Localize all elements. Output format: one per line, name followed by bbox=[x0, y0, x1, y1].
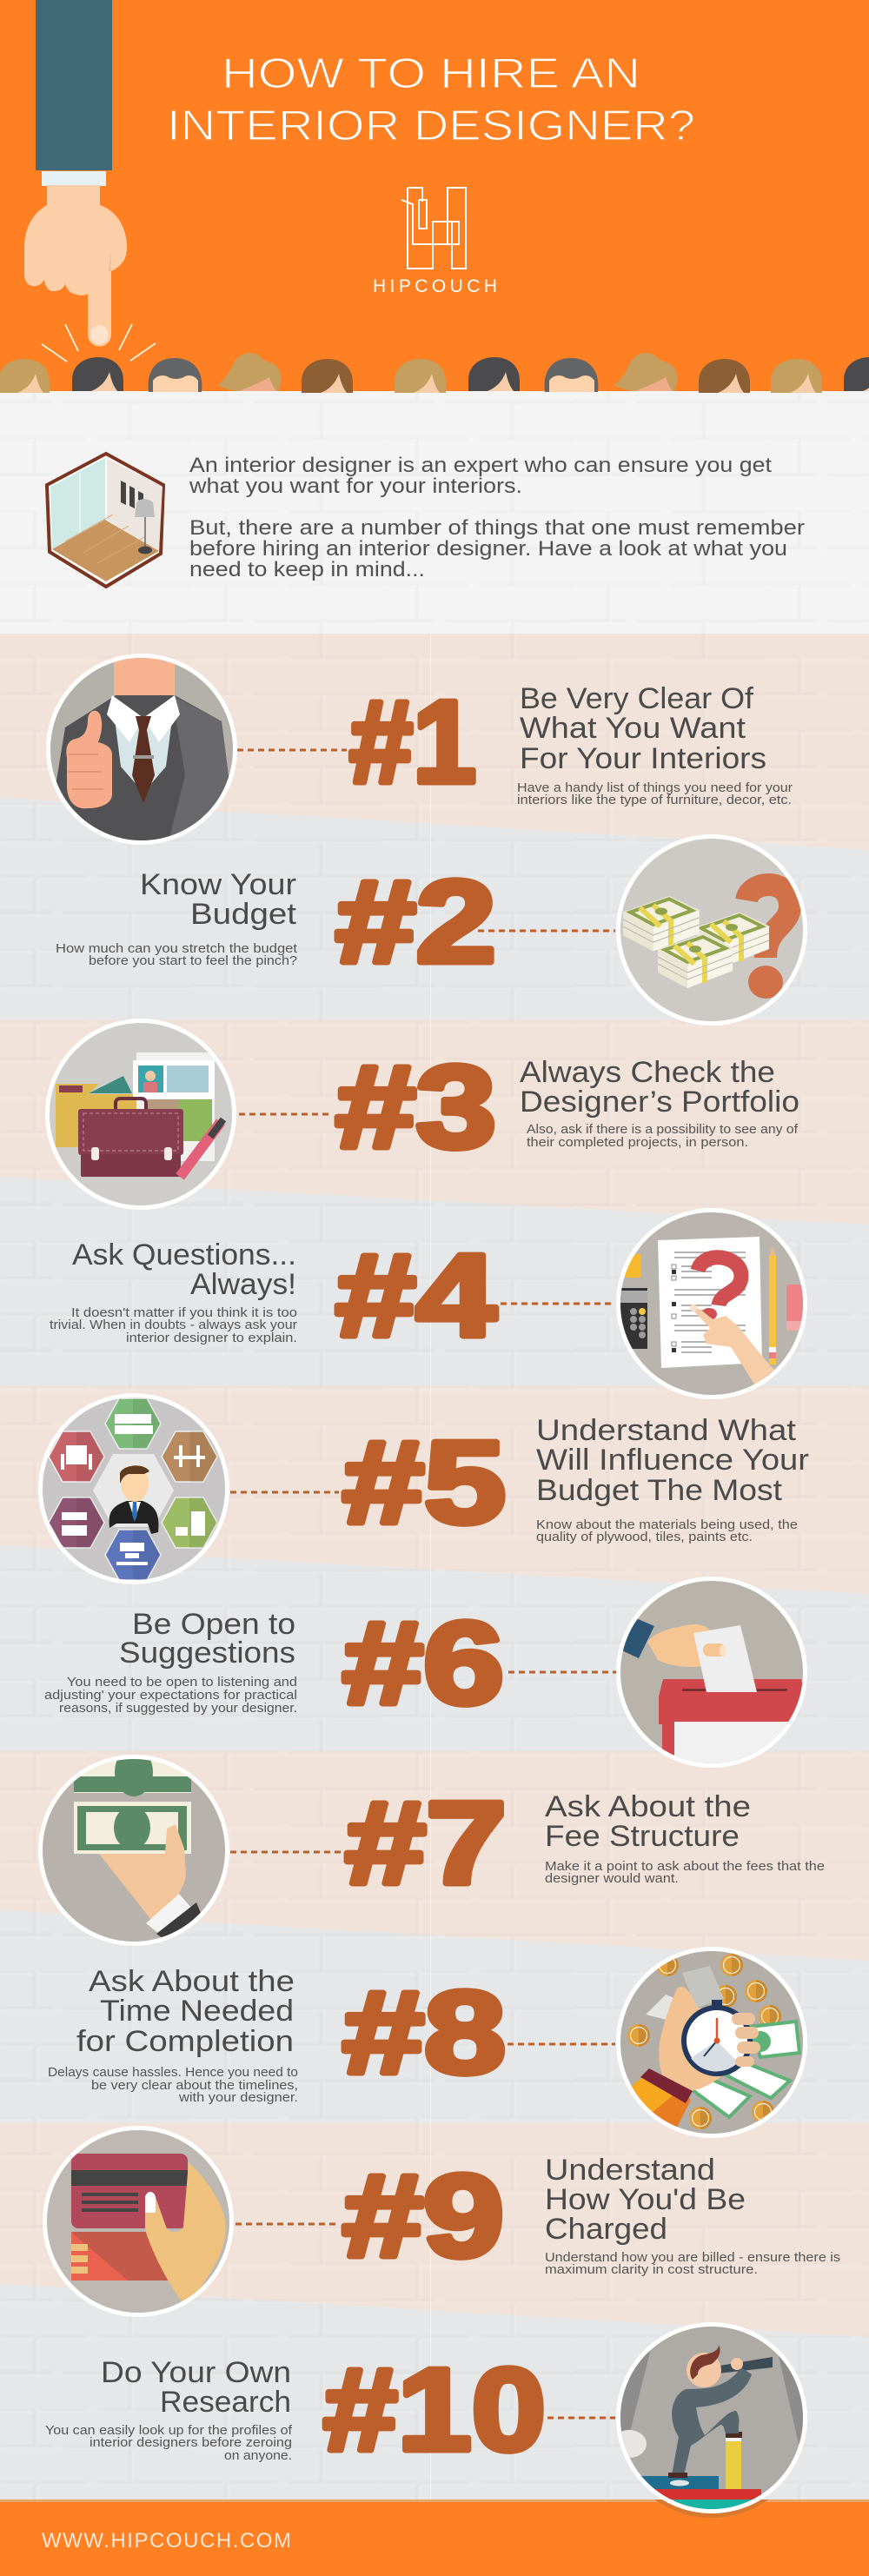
description 4 bbox=[50, 1306, 297, 1345]
step 6 bbox=[44, 1577, 807, 1774]
heading 8: for Completion bbox=[76, 2025, 294, 2058]
heading 6: Suggestions bbox=[119, 1637, 295, 1670]
step 4 bbox=[50, 1208, 807, 1399]
header panel bbox=[0, 0, 869, 393]
description 6: reasons, if suggested by your designer. bbox=[59, 1702, 297, 1716]
illustration: hand holding stopwatch bbox=[616, 1947, 807, 2138]
description 2: How much can you stretch the budget bbox=[56, 942, 297, 956]
heading 6 bbox=[119, 1608, 295, 1670]
description 6: adjusting' your expectations for practical bbox=[44, 1689, 297, 1703]
heading 5 bbox=[536, 1414, 809, 1507]
heading 9: How You'd Be bbox=[545, 2183, 746, 2216]
description 4: trivial. When in doubts - always ask your bbox=[50, 1318, 297, 1332]
description 3 bbox=[527, 1123, 799, 1150]
connector bbox=[237, 749, 347, 751]
illustration: man with telescope on books bbox=[612, 2321, 810, 2518]
heading 2: Know Your bbox=[140, 868, 296, 901]
description 10: on anyone. bbox=[224, 2449, 292, 2463]
logo: hipcouch bbox=[373, 188, 497, 296]
heading 3: Designer’s Portfolio bbox=[520, 1086, 799, 1119]
illustration: portfolio briefcase bbox=[45, 1019, 236, 1210]
intro text: But, there are a number of things that one must remember bbox=[189, 516, 805, 540]
heading 4 bbox=[72, 1238, 296, 1301]
description 8 bbox=[48, 2066, 298, 2105]
description 5: quality of plywood, tiles, paints etc. bbox=[536, 1530, 753, 1544]
step 3 bbox=[45, 1019, 799, 1210]
number 1: #1 bbox=[349, 676, 476, 807]
illustration: hand holding banknotes bbox=[38, 1748, 229, 1948]
heading 2: Budget bbox=[190, 898, 297, 931]
illustration: money stacks and question mark bbox=[616, 834, 807, 1026]
illustration: businessman thumbs up bbox=[46, 654, 237, 845]
description 1: interiors like the type of furniture, decor, etc. bbox=[517, 793, 792, 807]
description 1 bbox=[517, 781, 793, 807]
connector bbox=[547, 2416, 615, 2420]
number 6: #6 bbox=[342, 1597, 504, 1729]
connector bbox=[230, 1491, 339, 1493]
logo: hipcouch: HIPCOUCH bbox=[373, 276, 497, 296]
icon: isometric room bbox=[47, 454, 163, 587]
intro text: An interior designer is an expert who can ensure you get bbox=[189, 454, 772, 477]
description 6 bbox=[44, 1676, 297, 1716]
description 4: interior designer to explain. bbox=[126, 1331, 297, 1345]
number 7: #7 bbox=[345, 1777, 507, 1909]
title: HOW TO HIRE AN bbox=[222, 50, 640, 97]
description 2 bbox=[56, 942, 297, 968]
heading 4: Ask Questions... bbox=[72, 1238, 296, 1271]
connector bbox=[230, 1851, 341, 1853]
number 5: #5 bbox=[342, 1417, 506, 1548]
description 10 bbox=[45, 2424, 293, 2463]
intro panel bbox=[47, 454, 805, 587]
heading 5: Will Influence Your bbox=[536, 1444, 809, 1477]
heading 7 bbox=[545, 1790, 751, 1853]
icon: attention rays bbox=[42, 324, 156, 362]
connector bbox=[507, 2042, 615, 2046]
step 1 bbox=[46, 654, 793, 845]
title: INTERIOR DESIGNER? bbox=[167, 103, 695, 149]
heading 1: What You Want bbox=[520, 712, 746, 745]
heading 3: Always Check the bbox=[520, 1056, 775, 1089]
description 6: You need to be open to listening and bbox=[67, 1676, 297, 1690]
step 2 bbox=[56, 834, 807, 1026]
description 10: You can easily look up for the profiles of bbox=[45, 2424, 293, 2438]
connector bbox=[235, 2223, 339, 2225]
heading 1: For Your Interiors bbox=[520, 742, 766, 775]
heading 10 bbox=[101, 2356, 291, 2419]
heading 8: Time Needed bbox=[100, 1995, 294, 2028]
heading 5: Understand What bbox=[536, 1414, 797, 1447]
intro text: what you want for your interiors. bbox=[189, 475, 522, 498]
connector bbox=[501, 1302, 614, 1305]
step 5 bbox=[38, 1393, 809, 1584]
connector bbox=[239, 1112, 333, 1116]
number 3: #3 bbox=[335, 1041, 496, 1172]
illustration: ballot box bbox=[616, 1577, 807, 1774]
number 9: #9 bbox=[342, 2150, 504, 2281]
step 10 bbox=[45, 2321, 810, 2518]
heading 7: Fee Structure bbox=[545, 1820, 740, 1853]
heading 4: Always! bbox=[190, 1268, 296, 1301]
heading 8 bbox=[76, 1965, 295, 2058]
illustration: designer and furniture hexagons bbox=[38, 1393, 229, 1584]
description 8: with your designer. bbox=[178, 2091, 298, 2105]
description 1: Have a handy list of things you need for your bbox=[517, 781, 793, 795]
description 3: Also, ask if there is a possibility to see any of bbox=[527, 1123, 799, 1137]
description 7: designer would want. bbox=[545, 1872, 679, 1886]
heading 5: Budget The Most bbox=[536, 1474, 783, 1507]
description 9: maximum clarity in cost structure. bbox=[545, 2263, 758, 2277]
number 2: #2 bbox=[335, 856, 496, 987]
step 8 bbox=[48, 1947, 807, 2138]
heading 7: Ask About the bbox=[545, 1790, 751, 1823]
number 4: #4 bbox=[335, 1230, 496, 1361]
illustration: hand holding credit card bbox=[43, 2126, 234, 2317]
footer url: WWW.HIPCOUCH.COM bbox=[42, 2529, 291, 2553]
description 9 bbox=[545, 2251, 840, 2277]
number 8: #8 bbox=[342, 1967, 506, 2098]
title bbox=[167, 50, 695, 149]
heading 1 bbox=[520, 682, 766, 775]
heading 10: Do Your Own bbox=[101, 2356, 291, 2389]
intro text bbox=[189, 454, 805, 581]
description 10: interior designers before zeroing bbox=[90, 2436, 292, 2450]
heading 9: Understand bbox=[545, 2154, 715, 2187]
audience heads bbox=[0, 353, 869, 393]
heading 3 bbox=[520, 1056, 799, 1119]
step 7 bbox=[38, 1748, 825, 1948]
heading 8: Ask About the bbox=[89, 1965, 295, 1998]
footer bar bbox=[0, 2500, 869, 2576]
description 5: Know about the materials being used, the bbox=[536, 1518, 798, 1532]
heading 9: Charged bbox=[545, 2213, 667, 2246]
connector bbox=[508, 1670, 616, 1674]
description 8: Delays cause hassles. Hence you need to bbox=[48, 2066, 298, 2080]
heading 10: Research bbox=[160, 2386, 291, 2419]
step 9 bbox=[43, 2126, 840, 2317]
description 4: It doesn't matter if you think it is too bbox=[71, 1306, 297, 1320]
heading 1: Be Very Clear Of bbox=[520, 682, 754, 715]
description 8: be very clear about the timelines, bbox=[91, 2079, 298, 2093]
illustration: questionnaire bbox=[616, 1208, 807, 1399]
intro text: need to keep in mind... bbox=[189, 558, 425, 581]
description 7: Make it a point to ask about the fees that the bbox=[545, 1860, 825, 1874]
icon: pointing hand bbox=[24, 0, 127, 346]
heading 2 bbox=[140, 868, 297, 931]
connector bbox=[478, 930, 615, 932]
description 3: their completed projects, in person. bbox=[527, 1136, 748, 1150]
description 7 bbox=[545, 1860, 825, 1886]
number 10: #10 bbox=[323, 2344, 546, 2475]
description 5 bbox=[536, 1518, 798, 1544]
description 2: before you start to feel the pinch? bbox=[89, 954, 297, 968]
heading 6: Be Open to bbox=[132, 1608, 295, 1641]
description 9: Understand how you are billed - ensure there is bbox=[545, 2251, 840, 2265]
intro text: before hiring an interior designer. Have a look at what you bbox=[189, 537, 787, 561]
heading 9 bbox=[545, 2154, 746, 2246]
